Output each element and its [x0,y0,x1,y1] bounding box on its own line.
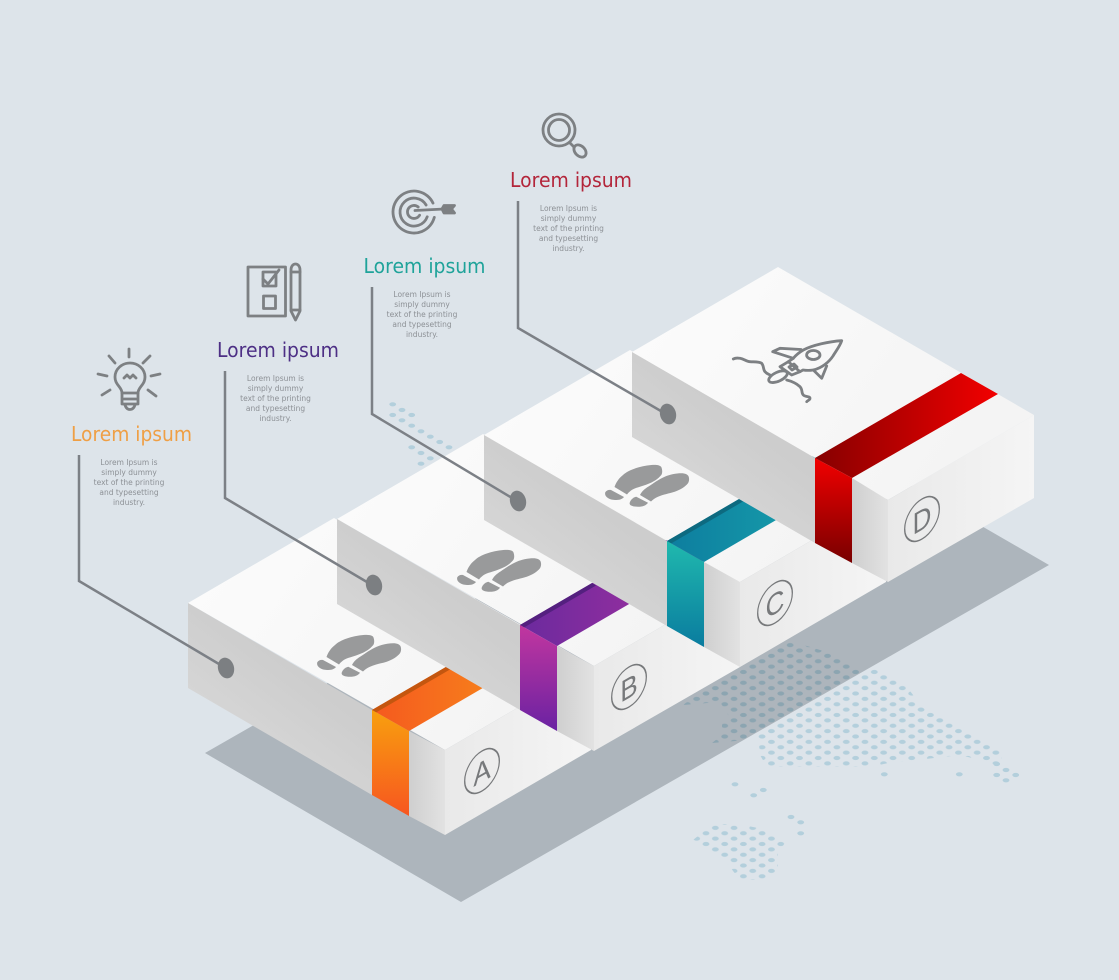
ground shadow [205,417,1049,902]
body text C: industry. [406,330,438,339]
step B block [337,434,740,751]
red band [815,373,998,563]
body text B: industry. [259,414,292,423]
letter badge B [612,657,646,717]
body text D: and typesetting [539,234,598,243]
heading B: Lorem ipsum [217,338,339,362]
body text A: and typesetting [99,488,159,497]
body text A: text of the printing [94,478,165,487]
body text C: simply dummy [394,300,450,309]
step D block [632,267,1034,582]
icon: light bulb [98,349,160,410]
orange band [372,625,555,816]
body text A: simply dummy [101,468,157,477]
letter badge C: C [766,583,784,626]
letter badge A: A [473,751,491,794]
icon: magnifier [543,114,588,159]
body text C: text of the printing [387,310,458,319]
body text C: and typesetting [392,320,452,329]
body text B: and typesetting [246,404,305,413]
body text B: text of the printing [240,394,311,403]
body text B: Lorem Ipsum is [247,374,304,383]
leader line D [518,201,678,426]
step C block [484,350,886,667]
heading C: Lorem ipsum [364,254,486,278]
body text D: simply dummy [541,214,597,223]
icon: checklist and pencil [248,264,300,320]
body text D: Lorem Ipsum is [540,204,597,213]
body text D: industry. [552,244,585,253]
leader line B [225,371,384,597]
letter badge A [465,741,499,801]
body text A: industry. [113,498,145,507]
icon: footprints B [457,550,541,592]
letter badge D: D [913,499,931,542]
icon: footprints C [605,465,689,507]
heading A: Lorem ipsum [71,422,192,446]
leader line C [372,287,528,513]
leader line A [79,455,236,680]
letter badge D [905,489,939,549]
heading D: Lorem ipsum [510,168,632,192]
step A block [188,518,591,835]
purple band [520,540,703,731]
teal band [667,456,850,647]
icon: footprints A [317,635,401,677]
dotted world map [389,402,1019,880]
letter badge B: B [620,667,638,710]
body text C: Lorem Ipsum is [393,290,451,299]
body text A: Lorem Ipsum is [100,458,158,467]
body text D: text of the printing [533,224,604,233]
letter badge C [758,573,792,633]
body text B: simply dummy [248,384,304,393]
icon: target [393,191,454,233]
icon: rocket [733,341,842,402]
